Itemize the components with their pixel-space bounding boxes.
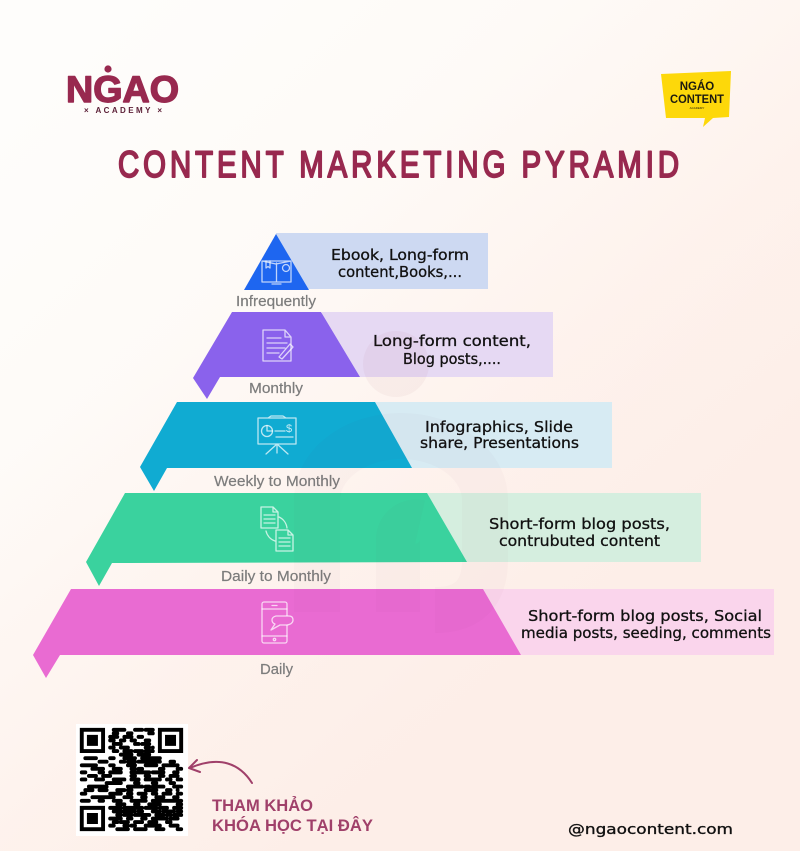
label: Infrequently: Infrequently — [236, 293, 317, 310]
description: short-form social — [521, 607, 771, 642]
label: Daily to Monthly: Daily to Monthly — [221, 568, 332, 585]
description panel: ebooks — [276, 233, 488, 289]
logo: Ngao Content speech bubble: NGÁO — [680, 80, 714, 93]
call to action: KHÓA HỌC TẠI ĐÂY — [212, 816, 373, 835]
call to action: THAM KHẢO — [212, 796, 313, 815]
tier 2: monthly — [193, 312, 553, 399]
description: Ebook: content,Books,... — [338, 263, 462, 281]
tier 4: daily to monthly — [86, 493, 701, 586]
description panel: long-form — [322, 312, 553, 377]
logo: Ngao Academy: NGAO — [66, 69, 179, 110]
logo: Ngao Academy: × ACADEMY × — [84, 106, 162, 115]
description: infographics — [420, 418, 579, 452]
description: long-form content: Long-form content, — [373, 332, 531, 350]
description: long-form content — [373, 332, 531, 368]
pyramid segment: teal blue — [140, 402, 412, 491]
arrow pointing to QR code — [189, 760, 252, 783]
icon: phone with chat bubble — [262, 602, 293, 643]
description: infographics: share, Presentations — [420, 434, 579, 452]
description: short-form content: Short-form blog posts, — [489, 515, 670, 533]
description: short-form social: Short-form blog posts, Social — [528, 607, 762, 625]
label: Weekly to Monthly: Weekly to Monthly — [214, 473, 341, 490]
description: short-form social: media posts, seeding, comments — [521, 624, 771, 642]
description: long-form content: Blog posts,.... — [403, 350, 501, 368]
logo: Ngao Content speech bubble — [661, 71, 731, 127]
pyramid segment: pink — [33, 589, 521, 678]
label: Monthly: Monthly — [249, 380, 304, 397]
QR code — [76, 724, 188, 836]
call to action — [212, 796, 373, 835]
icon: presentation board — [258, 416, 296, 454]
pyramid segment: purple — [193, 312, 360, 399]
logo: Ngao Content speech bubble: CONTENT — [670, 94, 724, 106]
pyramid segment: green — [86, 493, 467, 586]
tier 3: weekly to monthly — [140, 402, 612, 491]
icon: document and pencil — [263, 330, 293, 361]
label: Daily: Daily — [260, 661, 293, 678]
tier 5: daily — [33, 589, 774, 678]
icon: open book — [262, 261, 291, 284]
description panel: infographics — [375, 402, 612, 468]
description: Ebook: Ebook, Long-form — [331, 246, 469, 264]
description: short-form content: contrubuted content — [499, 532, 660, 550]
description panel: social — [483, 589, 774, 655]
logo: Ngao Content speech bubble: ACADEMY — [690, 106, 704, 110]
icon: two documents — [261, 507, 293, 551]
tier 1: infrequently — [236, 233, 488, 310]
pyramid segment: blue — [244, 234, 309, 290]
description: Ebook — [331, 246, 469, 281]
description: short-form content — [489, 515, 670, 550]
description panel: short-form — [427, 493, 701, 562]
handle: @ngaocontent.com — [568, 822, 733, 838]
icon: dollar sign: $ — [286, 423, 292, 435]
description: infographics: Infographics, Slide — [425, 418, 573, 436]
watermark: faint logo shape — [317, 331, 485, 612]
